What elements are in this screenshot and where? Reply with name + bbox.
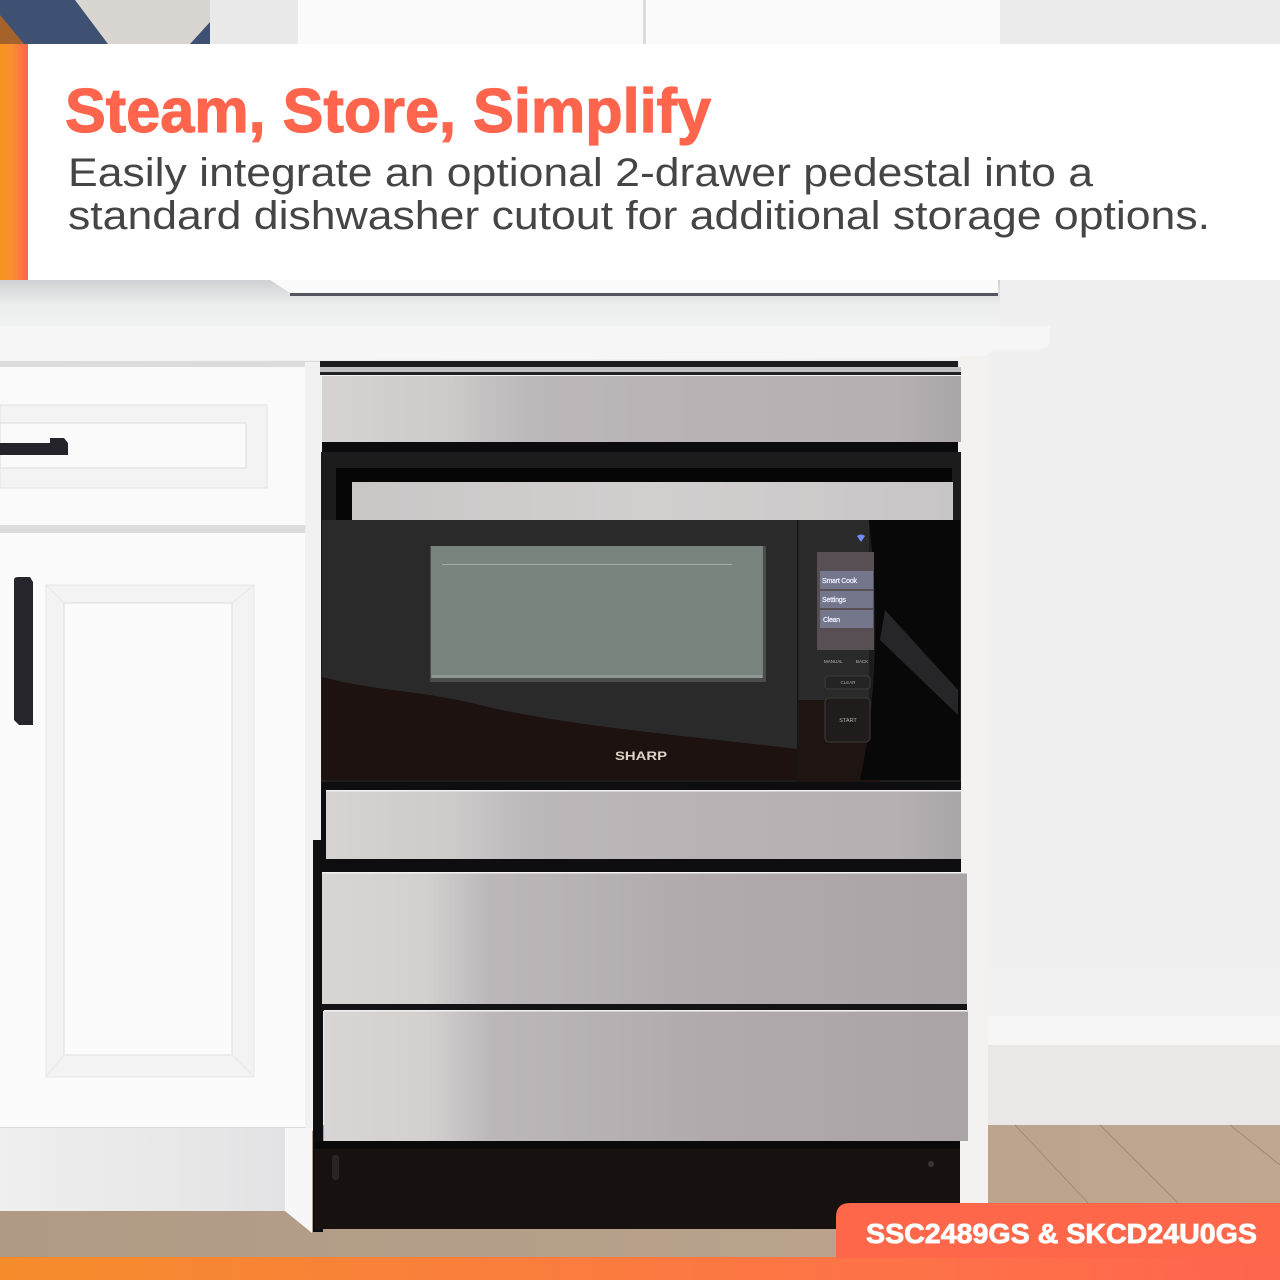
banner: white overlay: [0, 44, 1280, 280]
panel: upper stainless trim: [320, 361, 961, 456]
scene: upper backsplash tile and wall cabinets: [0, 0, 1280, 44]
bottom gradient bar: [0, 1257, 1280, 1280]
scene: countertop: [0, 280, 1050, 361]
oven window: [430, 546, 766, 682]
start button: START: [839, 718, 857, 724]
touch screen: Smart Cook: [822, 578, 858, 585]
touch screen: [817, 552, 874, 650]
title: Steam, Store, Simplify: [65, 77, 712, 146]
description: [68, 151, 1210, 238]
panel: black plinth: [315, 1141, 960, 1229]
clear button: CLEAR: [840, 680, 856, 685]
model number tag: [836, 1203, 1280, 1258]
cabinet toe kick: [0, 1128, 285, 1211]
oven handle: [352, 482, 953, 520]
panel: lower stainless trim: [313, 782, 961, 1232]
button labels: MANUAL: [824, 659, 843, 664]
door handle: [14, 577, 33, 725]
model number tag: SSC2489GS & SKCD24U0GS: [866, 1218, 1257, 1249]
panel: steam oven: [321, 452, 961, 782]
cabinet door: [0, 533, 305, 1127]
touch screen: Clean: [823, 617, 840, 624]
panel: lower pedestal drawer: [324, 1010, 968, 1141]
scene: wood floor: [0, 1125, 1280, 1260]
start button: [825, 698, 870, 742]
cabinet side panel: [285, 1128, 312, 1233]
clear button: [825, 676, 870, 689]
description: Easily integrate an optional 2-drawer pedestal into a: [68, 151, 1094, 195]
touch screen: Settings: [822, 597, 846, 604]
panel: upper pedestal drawer: [321, 872, 967, 1011]
cabinet drawer: [0, 367, 305, 525]
description: standard dishwasher cutout for additional storage options.: [68, 194, 1210, 238]
banner accent strip: [0, 44, 28, 280]
brand logo: SHARP: [615, 751, 667, 763]
panel: white base cabinet: [0, 361, 322, 1233]
control panel strip: [797, 520, 869, 782]
panel: right filler trim: [960, 356, 988, 1204]
button labels: [824, 659, 868, 664]
drawer handle: [0, 438, 68, 455]
button labels: BACK: [856, 659, 868, 664]
icon: wifi: [857, 534, 865, 542]
